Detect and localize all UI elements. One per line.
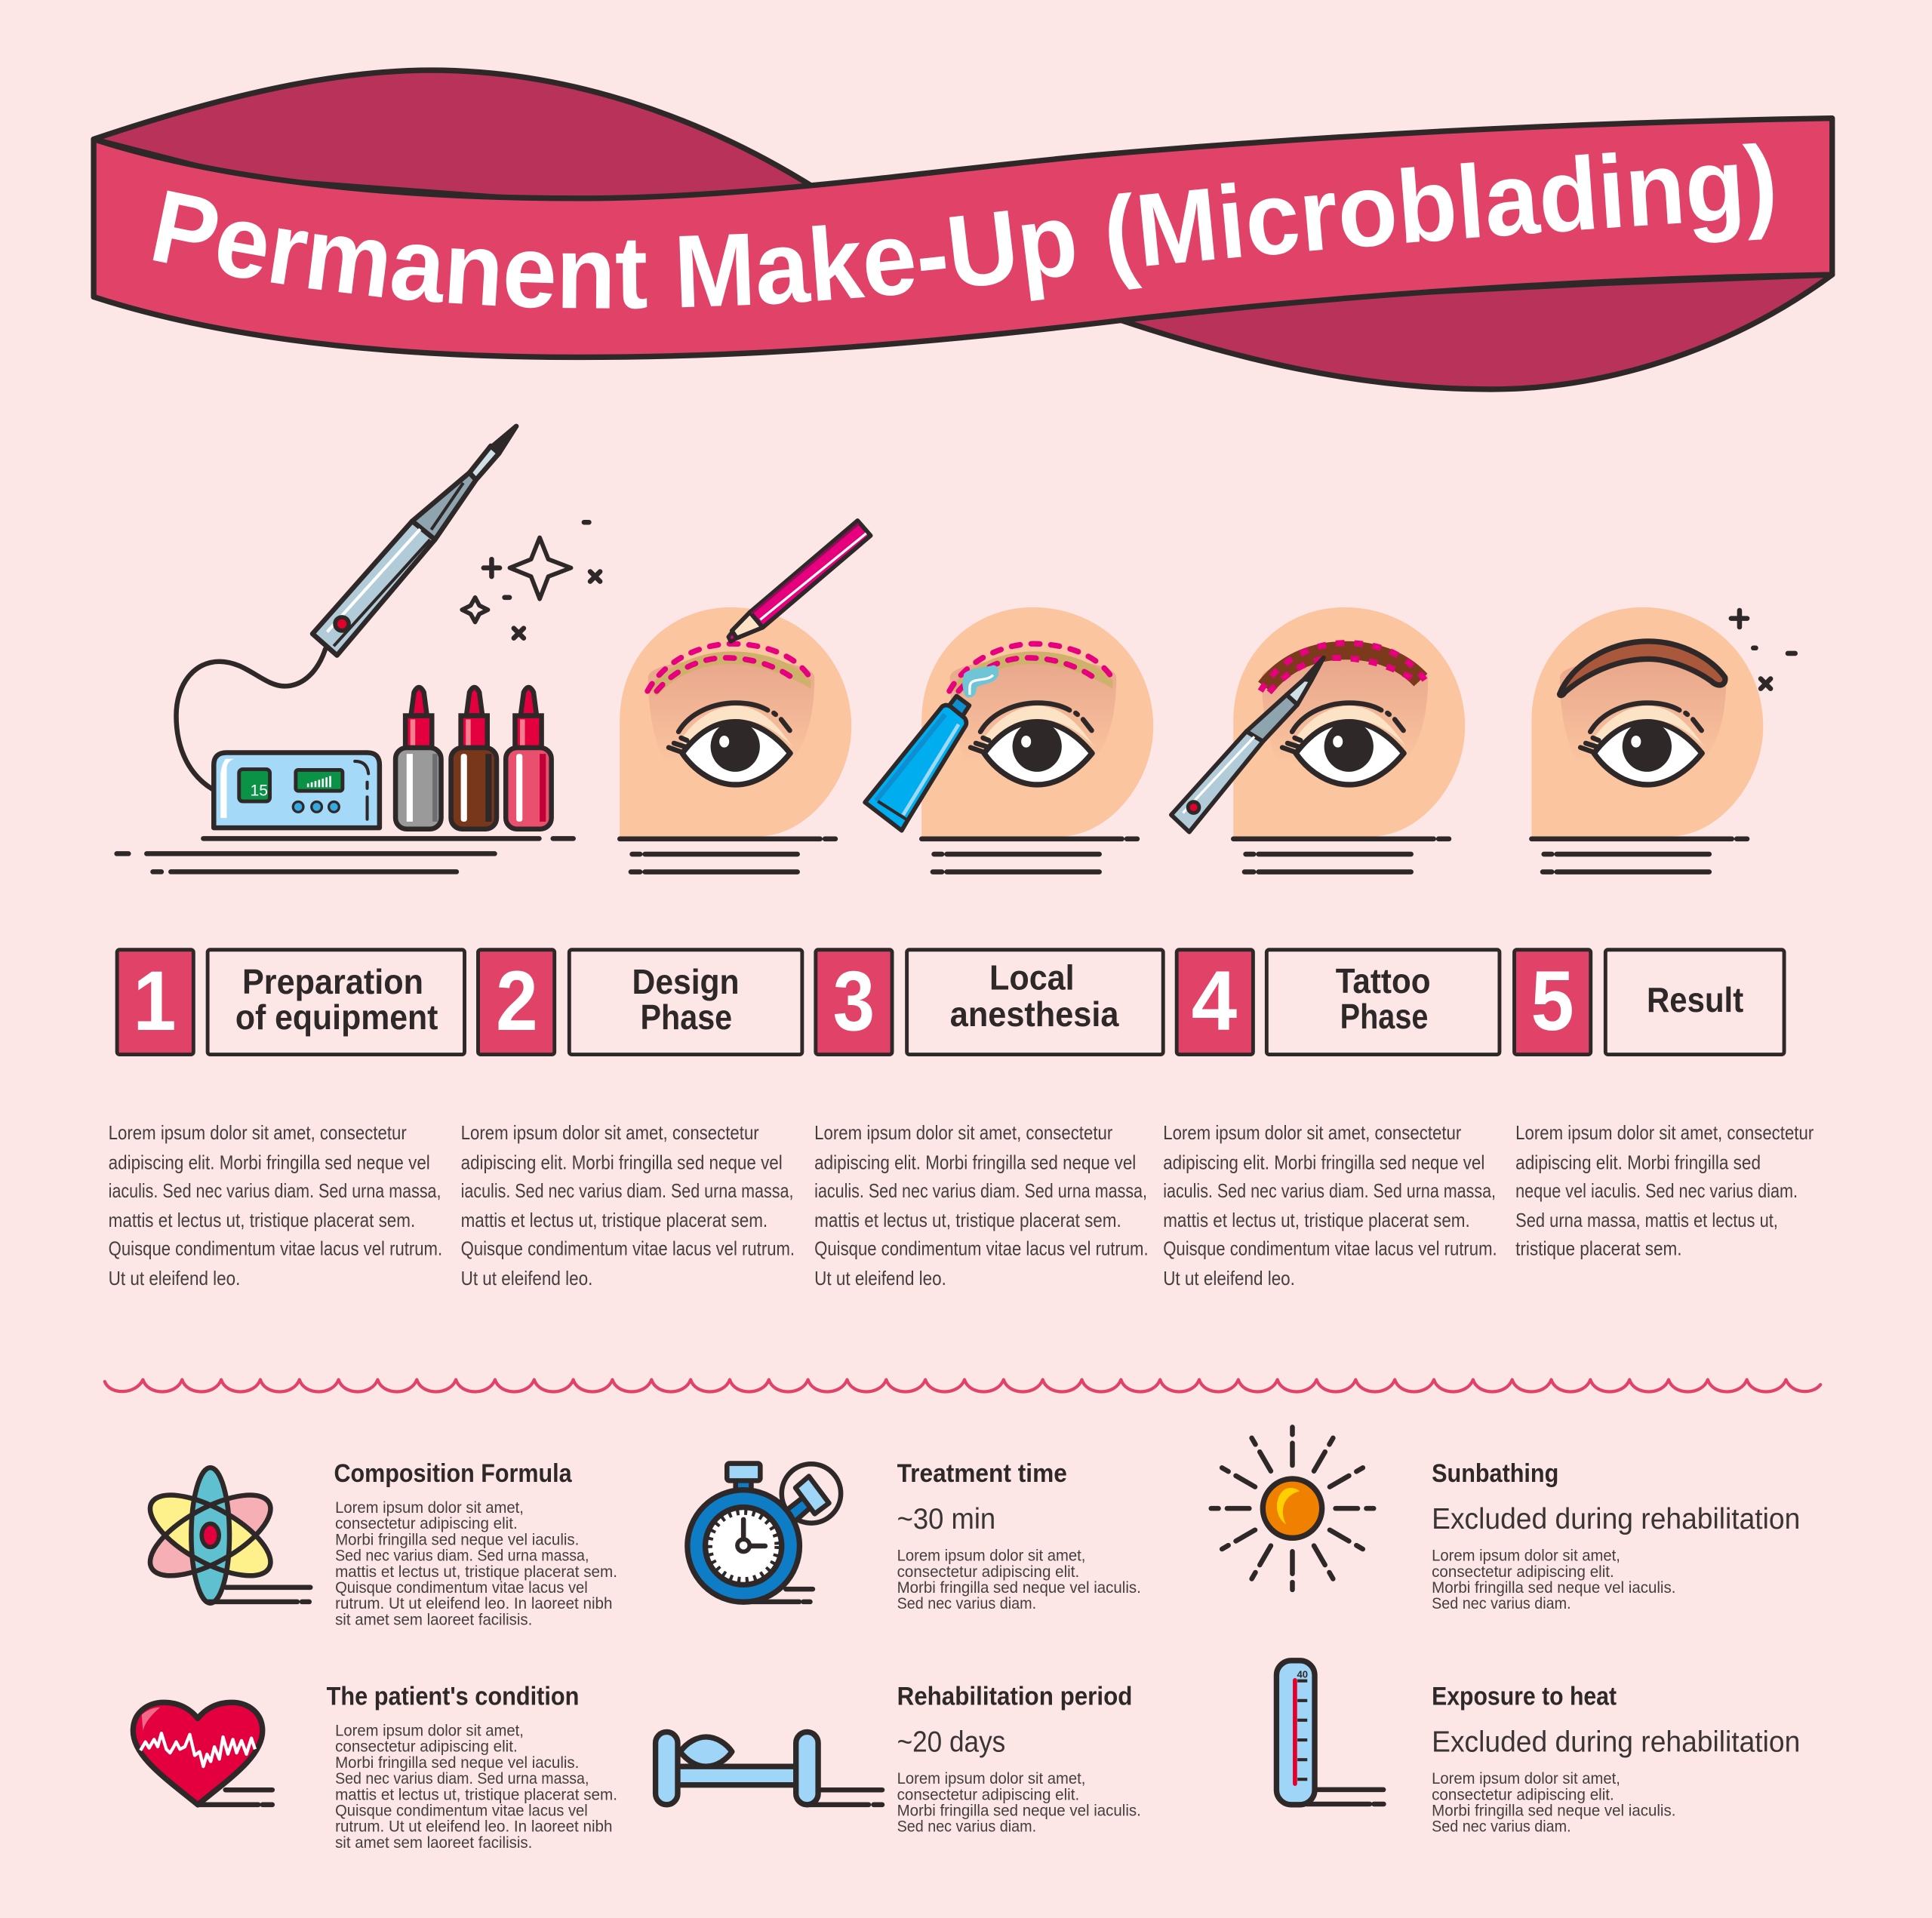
composition body text: Sed nec varius diam. Sed urna massa, <box>335 1548 589 1565</box>
step 3 label: Local <box>989 958 1075 997</box>
step 2 number: 2 <box>496 953 538 1048</box>
step 3 illustration: local anesthesia <box>865 607 1153 872</box>
composition body text: Lorem ipsum dolor sit amet, <box>335 1499 524 1517</box>
step 4 label: Phase <box>1340 997 1428 1036</box>
exposure heading: Exposure to heat <box>1432 1683 1617 1711</box>
treatment time body text: consectetur adipiscing elit. <box>897 1563 1079 1581</box>
brown ink bottle <box>451 687 497 829</box>
rehabilitation body text: Morbi fringilla sed neque vel iaculis. <box>897 1802 1141 1819</box>
step 2 description <box>461 1121 795 1289</box>
rehabilitation body text: consectetur adipiscing elit. <box>897 1786 1079 1803</box>
sunbathing value: Excluded during rehabilitation <box>1432 1503 1800 1535</box>
dashed brow outline <box>949 644 1114 691</box>
exposure body text: Morbi fringilla sed neque vel iaculis. <box>1432 1802 1675 1819</box>
sunbathing body text: Morbi fringilla sed neque vel iaculis. <box>1432 1579 1675 1597</box>
finished eyebrow <box>1560 641 1725 696</box>
step 1 number <box>117 950 193 1055</box>
face with eye <box>620 607 851 872</box>
composition body text: Quisque condimentum vitae lacus vel <box>335 1579 588 1597</box>
step 2 description: adipiscing elit. Morbi fringilla sed neque vel <box>461 1151 783 1173</box>
step 1 description: adipiscing elit. Morbi fringilla sed neque vel <box>109 1151 430 1173</box>
patient condition body text: Quisque condimentum vitae lacus vel <box>335 1802 588 1819</box>
step 1 label: Preparation <box>242 962 423 1001</box>
sunbathing body text: consectetur adipiscing elit. <box>1432 1563 1614 1581</box>
step headers <box>117 950 1784 1055</box>
icon: thermometer <box>1276 1661 1383 1805</box>
step 5 label: Result <box>1647 980 1743 1019</box>
patient condition body text: consectetur adipiscing elit. <box>335 1738 518 1756</box>
step 2 description: iaculis. Sed nec varius diam. Sed urna massa, <box>461 1179 793 1202</box>
treatment time value: ~30 min <box>897 1503 995 1535</box>
step 5 number <box>1515 950 1591 1055</box>
patient condition heading: The patient's condition <box>327 1683 579 1711</box>
title ribbon <box>91 67 1835 392</box>
rehabilitation value: ~20 days <box>897 1726 1005 1759</box>
step 2 label <box>569 950 802 1055</box>
step 3 description: Ut ut eleifend leo. <box>814 1267 946 1289</box>
face with eye <box>1531 607 1763 872</box>
sunbathing heading: Sunbathing <box>1432 1459 1558 1488</box>
step 3 number <box>816 950 892 1055</box>
step 3 description <box>814 1121 1149 1289</box>
step 4 number: 4 <box>1192 953 1238 1048</box>
step 4 description: Ut ut eleifend leo. <box>1163 1267 1295 1289</box>
treatment time body text: Morbi fringilla sed neque vel iaculis. <box>897 1579 1141 1597</box>
tattoo pen <box>1171 658 1324 832</box>
control unit <box>214 753 380 828</box>
step 3 description: Quisque condimentum vitae lacus vel rutrum. <box>814 1237 1149 1260</box>
step 1 label <box>208 950 465 1055</box>
step 5 description: adipiscing elit. Morbi fringilla sed <box>1515 1151 1761 1173</box>
treatment time body text: Lorem ipsum dolor sit amet, <box>897 1548 1085 1565</box>
icon: heart <box>133 1702 272 1805</box>
exposure body text: Lorem ipsum dolor sit amet, <box>1432 1770 1620 1787</box>
patient condition body text <box>335 1722 617 1852</box>
step 2 illustration: design phase <box>620 521 871 872</box>
step 3 description: iaculis. Sed nec varius diam. Sed urna massa, <box>814 1179 1147 1202</box>
step 1 number: 1 <box>133 953 176 1048</box>
face with eye <box>1233 607 1465 872</box>
patient condition body text: mattis et lectus ut, tristique placerat sem. <box>335 1786 617 1803</box>
ground lines <box>117 838 574 871</box>
composition body text: consectetur adipiscing elit. <box>335 1515 518 1532</box>
step 4 illustration: tattoo phase <box>1171 607 1465 872</box>
step 1 label: of equipment <box>235 997 438 1037</box>
patient condition body text: rutrum. Ut ut eleifend leo. In laoreet nibh <box>335 1818 612 1836</box>
composition body text <box>335 1499 617 1628</box>
step 2 description: Ut ut eleifend leo. <box>461 1267 592 1289</box>
treatment time body text <box>897 1548 1141 1612</box>
exposure body text <box>1432 1770 1675 1836</box>
cream tube <box>865 696 969 831</box>
step 5 description <box>1515 1121 1814 1260</box>
brown brow with pigment <box>1266 650 1420 687</box>
step 4 description: mattis et lectus ut, tristique placerat sem. <box>1163 1209 1470 1231</box>
icon: thermometer: 40 <box>1297 1669 1308 1680</box>
composition heading: Composition Formula <box>334 1459 572 1488</box>
composition body text: mattis et lectus ut, tristique placerat sem. <box>335 1563 617 1581</box>
step 1 illustration: equipment <box>117 426 600 871</box>
composition body text: rutrum. Ut ut eleifend leo. In laoreet nibh <box>335 1595 612 1612</box>
marker pencil <box>728 521 871 642</box>
sunbathing body text: Sed nec varius diam. <box>1432 1595 1571 1612</box>
icon: bed <box>656 1732 882 1805</box>
step 2 description: mattis et lectus ut, tristique placerat sem. <box>461 1209 768 1231</box>
icon: atom <box>138 1468 310 1603</box>
cord <box>176 649 325 789</box>
sparkle marks <box>1731 610 1795 689</box>
step 3 label <box>907 950 1163 1055</box>
rehabilitation body text: Lorem ipsum dolor sit amet, <box>897 1770 1085 1787</box>
patient condition body text: Lorem ipsum dolor sit amet, <box>335 1722 524 1739</box>
step 4 label <box>1266 950 1500 1055</box>
ribbon back fold right <box>1121 275 1832 389</box>
dashed brow outline <box>648 644 812 691</box>
step 3 description: adipiscing elit. Morbi fringilla sed neque vel <box>814 1151 1136 1173</box>
step 4 description <box>1163 1121 1497 1289</box>
rehabilitation heading: Rehabilitation period <box>897 1683 1132 1711</box>
composition body text: Morbi fringilla sed neque vel iaculis. <box>335 1531 579 1548</box>
pink ink bottle <box>506 687 552 829</box>
step 2 label: Phase <box>640 997 732 1037</box>
step 3 description: mattis et lectus ut, tristique placerat sem. <box>814 1209 1121 1231</box>
step 4 label: Tattoo <box>1336 961 1431 1000</box>
step 1 description: Ut ut eleifend leo. <box>109 1267 240 1289</box>
rehabilitation body text <box>897 1770 1141 1836</box>
step 4 description: iaculis. Sed nec varius diam. Sed urna massa, <box>1163 1179 1496 1202</box>
sunbathing body text: Lorem ipsum dolor sit amet, <box>1432 1548 1620 1565</box>
patient condition body text: Sed nec varius diam. Sed urna massa, <box>335 1770 589 1787</box>
patient condition body text: Morbi fringilla sed neque vel iaculis. <box>335 1754 579 1772</box>
step 4 description: Lorem ipsum dolor sit amet, consectetur <box>1163 1121 1462 1144</box>
rehabilitation body text: Sed nec varius diam. <box>897 1818 1036 1836</box>
step 4 description: adipiscing elit. Morbi fringilla sed neque vel <box>1163 1151 1484 1173</box>
patient condition body text: sit amet sem laoreet facilisis. <box>335 1834 532 1852</box>
exposure value: Excluded during rehabilitation <box>1432 1726 1800 1759</box>
step 4 number <box>1177 950 1253 1055</box>
step 3 number: 3 <box>833 953 875 1048</box>
step 5 label <box>1605 950 1784 1055</box>
pale brow <box>648 651 811 696</box>
step 4 description: Quisque condimentum vitae lacus vel rutrum. <box>1163 1237 1497 1260</box>
treatment time body text: Sed nec varius diam. <box>897 1595 1036 1612</box>
exposure body text: Sed nec varius diam. <box>1432 1818 1571 1836</box>
exposure body text: consectetur adipiscing elit. <box>1432 1786 1614 1803</box>
step 2 number <box>478 950 555 1055</box>
control unit: 15 <box>250 782 268 800</box>
step 1 description: iaculis. Sed nec varius diam. Sed urna massa, <box>109 1179 441 1202</box>
step 2 description: Lorem ipsum dolor sit amet, consectetur <box>461 1121 759 1144</box>
ribbon back fold left <box>94 70 816 203</box>
ribbon front band <box>94 118 1832 357</box>
step 5 description: tristique placerat sem. <box>1515 1237 1682 1260</box>
step 1 description <box>109 1121 442 1289</box>
pen handpiece <box>312 426 516 656</box>
step 2 description: Quisque condimentum vitae lacus vel rutrum. <box>461 1237 795 1260</box>
step 3 description: Lorem ipsum dolor sit amet, consectetur <box>814 1121 1113 1144</box>
dashed brow outline <box>1260 643 1426 693</box>
step 1 description: Quisque condimentum vitae lacus vel rutrum. <box>109 1237 442 1260</box>
step 5 number: 5 <box>1531 953 1574 1048</box>
face with eye <box>921 607 1153 872</box>
step 1 description: mattis et lectus ut, tristique placerat sem. <box>109 1209 415 1231</box>
grey ink bottle <box>395 687 441 829</box>
step 5 illustration: result <box>1531 607 1795 872</box>
step 5 description: Lorem ipsum dolor sit amet, consectetur <box>1515 1121 1814 1144</box>
icon: sun <box>1211 1427 1374 1590</box>
treatment time heading: Treatment time <box>897 1459 1067 1488</box>
step 5 description: neque vel iaculis. Sed nec varius diam. <box>1515 1179 1798 1202</box>
anesthetic gel <box>962 665 998 697</box>
sparkles <box>462 522 600 638</box>
sunbathing body text <box>1432 1548 1675 1612</box>
composition body text: sit amet sem laoreet facilisis. <box>335 1611 532 1628</box>
step 1 description: Lorem ipsum dolor sit amet, consectetur <box>109 1121 407 1144</box>
step 3 label: anesthesia <box>950 994 1119 1034</box>
icon: stopwatch <box>688 1464 841 1602</box>
pale brow <box>950 651 1112 696</box>
step 5 description: Sed urna massa, mattis et lectus ut, <box>1515 1209 1778 1231</box>
title text: Permanent Make-Up (Microblading) <box>152 143 1774 309</box>
step 2 label: Design <box>632 962 740 1001</box>
